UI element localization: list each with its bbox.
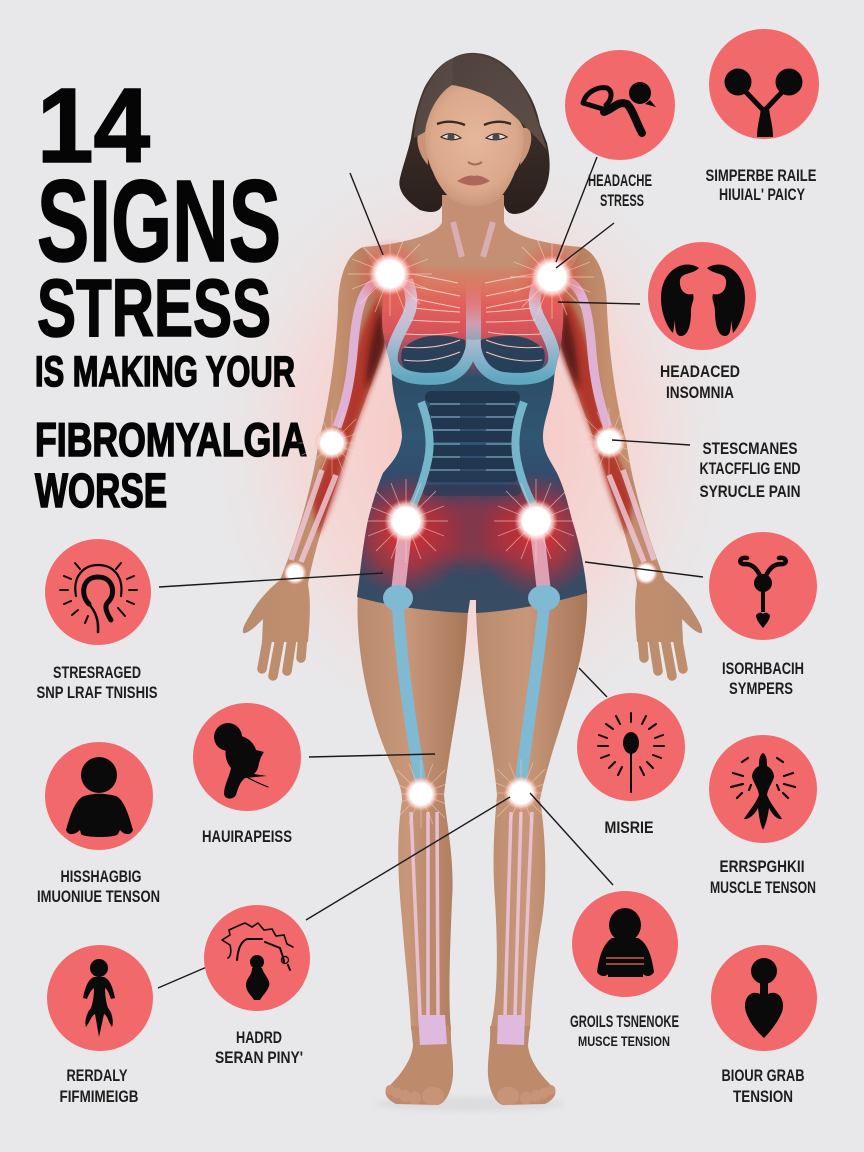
label: HEADACED [660, 363, 740, 381]
hair front right [452, 54, 547, 150]
icon: person with tension [572, 891, 678, 997]
right arm [547, 247, 702, 676]
chest bands [392, 280, 554, 379]
title: IS MAKING YOUR [35, 348, 295, 396]
shin bones [411, 812, 438, 1016]
label: ISORHBACIH [722, 660, 804, 678]
left dark chest [401, 336, 465, 376]
label [588, 172, 652, 210]
icon: uterus [709, 532, 817, 640]
label: SNP LRAF TNISHIS [36, 684, 158, 702]
chest rib lines [404, 273, 542, 361]
pain points [283, 232, 658, 828]
icon: joint [709, 29, 819, 139]
icon: torso with wave [204, 905, 310, 1011]
icon: migraine [577, 693, 685, 801]
label: IMUONIUE TENSON [37, 888, 160, 906]
label: HADRD [236, 1029, 282, 1047]
title: 14 [37, 67, 150, 185]
thigh bones [383, 585, 560, 780]
label: HEADACHE [588, 172, 652, 190]
label [706, 167, 816, 204]
title: STRESS [37, 263, 271, 354]
neck strands [453, 222, 493, 257]
hip glow centre [417, 496, 527, 564]
face [437, 122, 511, 186]
floor shadow [375, 1097, 565, 1111]
label: HIUIAL' PAICY [719, 186, 805, 204]
icon: person bust [45, 742, 153, 850]
label [37, 868, 160, 906]
icon: headache [565, 50, 675, 160]
icon: lungs [648, 242, 756, 350]
hip glow right [482, 476, 584, 594]
label: SYMPERS [729, 680, 793, 698]
ears [417, 128, 531, 165]
label [700, 440, 801, 501]
label: INSOMNIA [666, 384, 734, 402]
label [570, 1013, 679, 1049]
right dark chest [481, 336, 545, 376]
hip glow left [360, 476, 461, 594]
label: SIMPERBE RAILE [706, 167, 816, 185]
head [425, 85, 524, 206]
label: GROILS TSNENOKE [570, 1013, 679, 1031]
label: MUSCE TENSION [578, 1033, 670, 1049]
label: KTACFFLIG END [700, 460, 801, 478]
bodysuit [357, 270, 587, 613]
abdomen side bars [413, 402, 533, 505]
title: WORSE [35, 465, 167, 518]
abdomen slats [423, 391, 521, 496]
label: HAUIRAPEISS [202, 828, 292, 846]
human figure [243, 53, 702, 1105]
label [36, 664, 158, 702]
label: STRESS [600, 192, 644, 210]
label: FIFMIMEIGB [60, 1088, 139, 1106]
leader lines [158, 157, 703, 988]
slat highlights [430, 404, 515, 470]
pink body glow [185, 120, 755, 760]
label [722, 1067, 805, 1106]
right foot [488, 1026, 556, 1105]
label: TENSION [733, 1088, 793, 1106]
label: ERRSPGHKII [720, 858, 804, 876]
label: STRESRAGED [53, 664, 141, 682]
label [722, 660, 804, 698]
label: STESCMANES [702, 440, 798, 458]
neck and chest skin [363, 195, 582, 300]
icon: head radiating [45, 539, 151, 645]
icon: muscle figure [709, 735, 817, 843]
title: SIGNS [37, 156, 281, 286]
label: SERAN PINY' [215, 1049, 303, 1067]
label: MUSCLE TENSON [710, 879, 816, 897]
icon: heart figure [711, 945, 817, 1051]
label [710, 858, 816, 897]
right leg [476, 590, 587, 1030]
label: SYRUCLE PAIN [700, 483, 800, 501]
hair front left [414, 58, 453, 138]
label: RERDALY [66, 1067, 128, 1085]
label [660, 363, 740, 402]
hip stems [398, 530, 544, 592]
label [60, 1067, 139, 1106]
label: MISRIE [604, 819, 654, 837]
centre chest strip [466, 288, 481, 346]
label: BIOUR GRAB [722, 1067, 805, 1085]
icon: standing figure [47, 945, 153, 1051]
left foot [386, 1026, 453, 1105]
left arm [243, 247, 398, 676]
ankle patches [418, 1015, 525, 1045]
left leg [357, 590, 468, 1030]
title [35, 67, 307, 518]
label: HISSHAGBIG [60, 868, 142, 886]
label [215, 1029, 303, 1067]
hair back [399, 53, 550, 214]
title: FIBROMYALGIA [35, 413, 307, 466]
icon: head profile [193, 703, 301, 811]
